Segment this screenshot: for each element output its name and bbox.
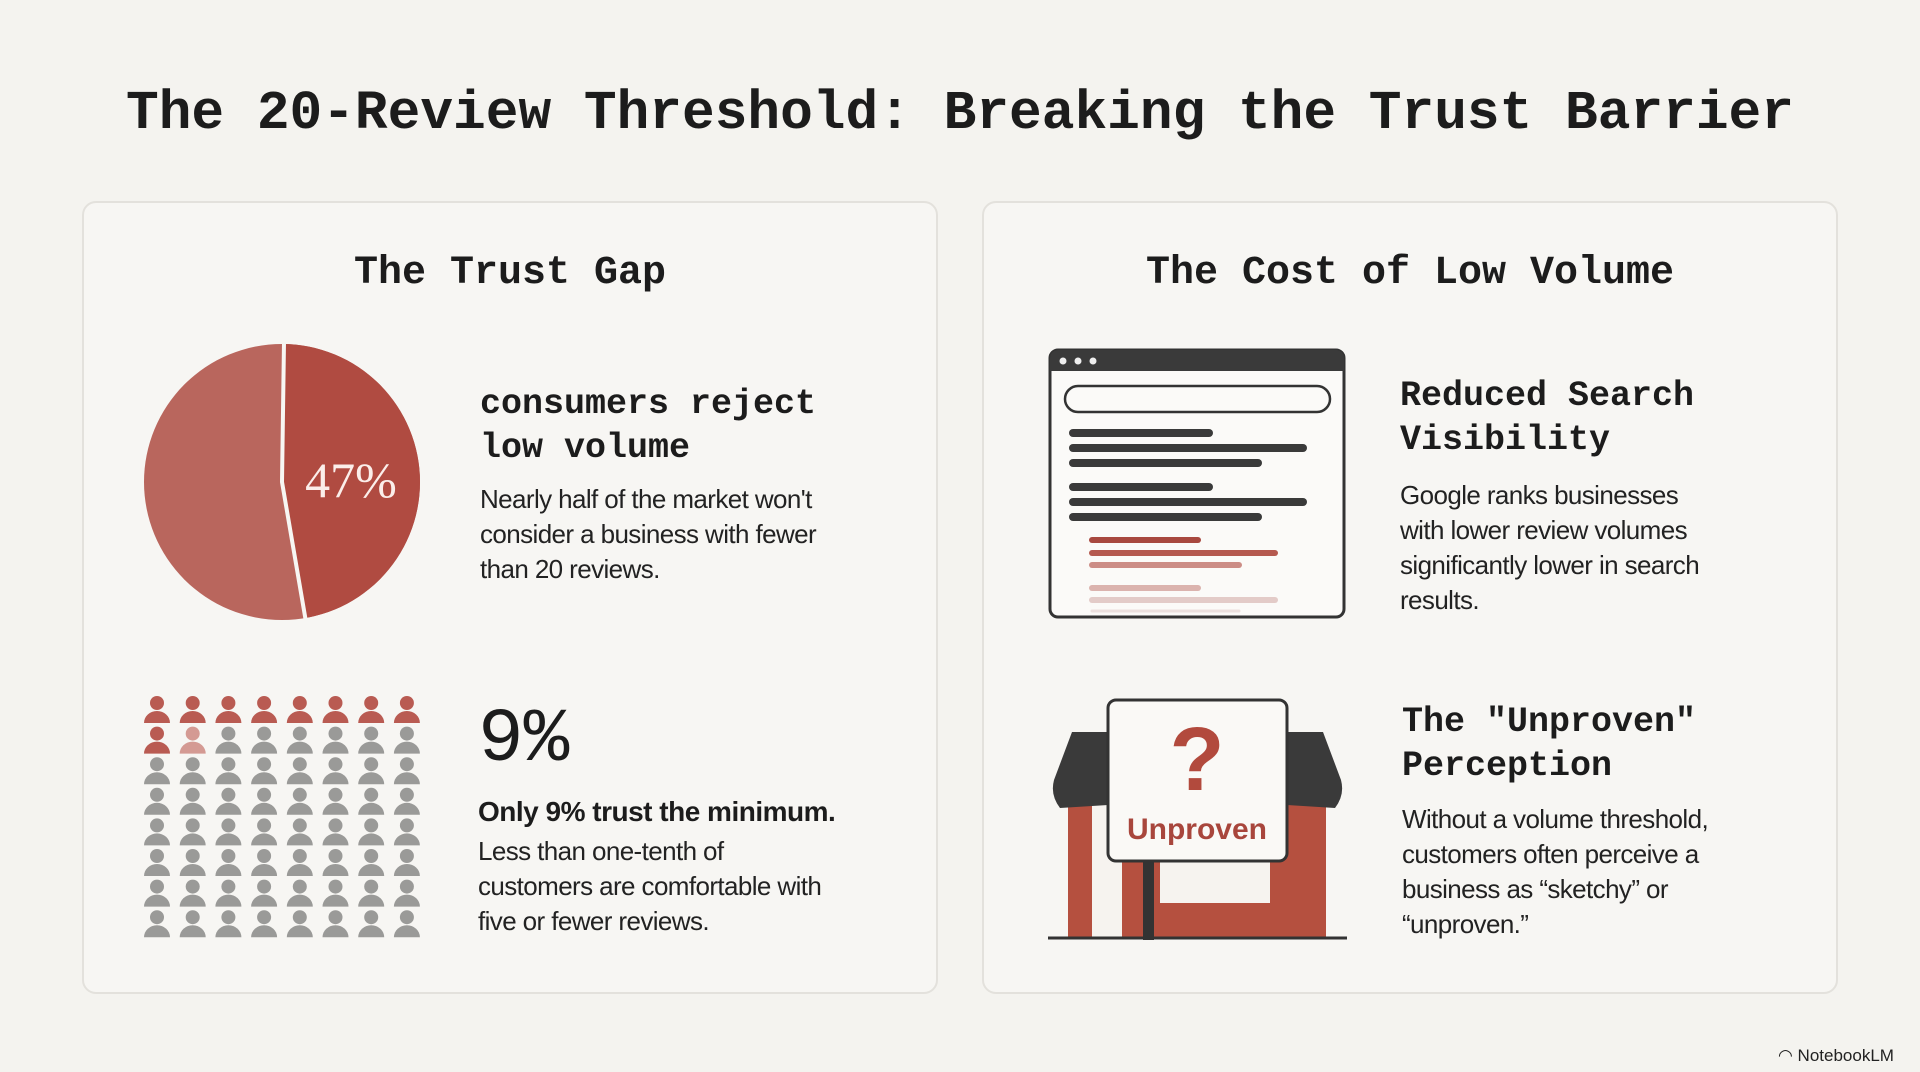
text: 9% trust minimum: customers are comfortable with — [478, 871, 821, 901]
text: consumers reject: consider a business with fewer — [480, 519, 816, 549]
panel: trust gap — [82, 201, 938, 994]
icon: unproven storefront: ? — [1170, 710, 1224, 810]
text: reduced search visibility: Reduced Search — [1400, 376, 1694, 416]
text: consumers reject: consumers reject — [480, 384, 816, 424]
text: unproven perception: business as “sketchy” or — [1402, 874, 1668, 904]
title: The 20-Review Threshold: Breaking the Trust Barrier — [126, 84, 1794, 145]
text: unproven perception: Perception — [1402, 746, 1612, 786]
text: consumers reject: Nearly half of the market won't — [480, 484, 812, 514]
text: unproven perception: customers often perceive a — [1402, 839, 1699, 869]
watermark: NotebookLM: ◠ NotebookLM — [1778, 1046, 1894, 1065]
text: reduced search visibility: Visibility — [1400, 420, 1610, 460]
text: 9% trust minimum: Less than one-tenth of — [478, 836, 724, 866]
text: unproven perception: The "Unproven" — [1402, 702, 1696, 742]
text: reduced search visibility: results. — [1400, 585, 1479, 615]
icon: unproven storefront — [1048, 698, 1347, 940]
icon: browser search results — [1048, 348, 1346, 618]
text: consumers reject — [480, 384, 816, 584]
pie chart 47% — [144, 344, 420, 620]
pie chart 47%: 47% — [305, 452, 397, 508]
text: reduced search visibility: with lower review volumes — [1400, 515, 1687, 545]
heading: The Cost of Low Volume: The Cost of Low Volume — [1146, 251, 1674, 296]
icon grid: people 9% — [144, 696, 420, 938]
text: unproven perception: Without a volume threshold, — [1402, 804, 1708, 834]
text: 9% trust minimum: 9% — [478, 697, 569, 783]
heading: The Trust Gap: The Trust Gap — [354, 251, 666, 296]
text: 9% trust minimum — [478, 697, 835, 936]
text: 9% trust minimum: five or fewer reviews. — [478, 906, 709, 936]
text: 9% trust minimum: Only 9% trust the minimum. — [478, 796, 835, 827]
panel: cost of low volume — [982, 201, 1838, 994]
text: reduced search visibility — [1400, 376, 1699, 615]
text: unproven perception — [1402, 702, 1708, 939]
text: unproven perception: “unproven.” — [1402, 909, 1528, 939]
text: reduced search visibility: significantly lower in search — [1400, 550, 1699, 580]
text: consumers reject: low volume — [480, 428, 690, 468]
text: consumers reject: than 20 reviews. — [480, 554, 660, 584]
text: reduced search visibility: Google ranks businesses — [1400, 480, 1678, 510]
icon: unproven storefront: Unproven — [1127, 813, 1267, 846]
